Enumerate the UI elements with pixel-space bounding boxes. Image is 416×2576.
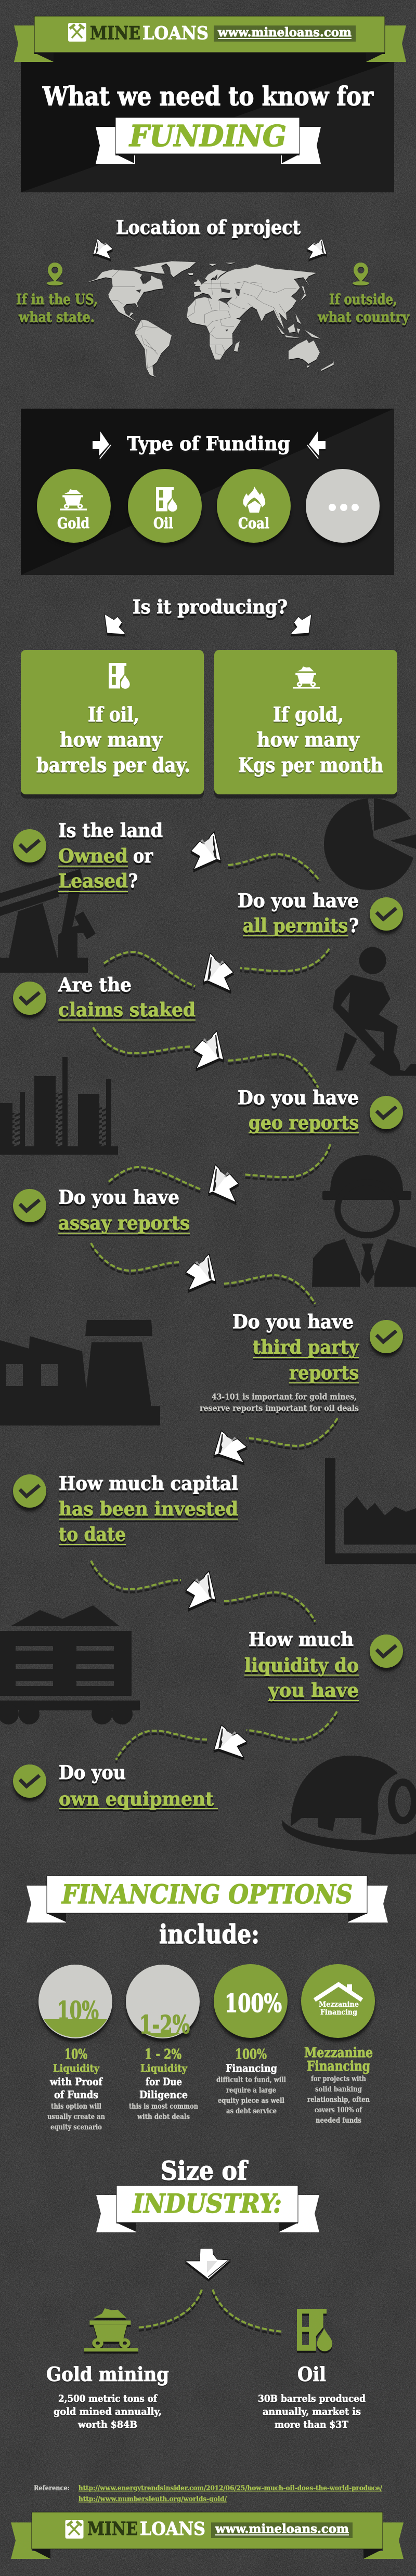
dashed connector 14 <box>116 1731 207 1760</box>
arrow: location right <box>307 239 327 259</box>
arrow: type right <box>307 431 326 459</box>
background icon: pumpjack <box>0 867 96 973</box>
caption <box>47 2047 105 2132</box>
panel: if oil <box>21 650 204 799</box>
gauge circle <box>301 1964 375 2038</box>
background icon: power plant <box>0 1320 160 1426</box>
text: gold mining: worth $84B <box>77 2419 137 2430</box>
background icon: miner helmet <box>282 1756 416 1854</box>
footer url: www.mineloans.com <box>215 2522 349 2536</box>
map borders <box>112 270 296 368</box>
check mark <box>370 897 403 931</box>
panel: title block <box>21 52 394 192</box>
dashed connector 5 <box>228 1054 318 1088</box>
question text <box>58 974 196 1021</box>
caption: solid banking <box>315 2085 362 2094</box>
question text: own equipment <box>59 1788 214 1810</box>
note text <box>200 1392 359 1413</box>
question text: or <box>133 845 153 867</box>
references <box>34 2485 382 2503</box>
caption: relationship, often <box>307 2096 370 2104</box>
caption: 10% <box>64 2047 87 2062</box>
arrow 1 <box>191 832 221 870</box>
question text <box>58 820 163 892</box>
arrow 2 <box>203 953 233 991</box>
caption: this option will <box>51 2102 101 2111</box>
text: gold mining: Gold mining <box>46 2363 169 2386</box>
arrow 3 <box>193 1031 224 1069</box>
dashed connector: gold <box>138 2290 202 2327</box>
question text: Do you have <box>232 1311 354 1333</box>
arrow 8 <box>214 1725 247 1758</box>
dashed connector 12 <box>224 1592 315 1622</box>
dashed connector 11 <box>91 1561 181 1589</box>
heading: location of project: Location of project <box>116 217 301 239</box>
caption: for projects with <box>311 2075 366 2083</box>
circle: gold <box>37 469 111 543</box>
caption: Liquidity <box>140 2062 188 2074</box>
check mark <box>370 1320 403 1353</box>
arrow: location left <box>93 239 113 259</box>
question text: Do you have <box>58 1186 179 1208</box>
dashed connector 9 <box>224 1275 315 1304</box>
question text: Do you have <box>238 890 359 912</box>
icon: map pin right <box>353 263 369 285</box>
references: Reference: <box>34 2485 70 2492</box>
check mark <box>370 1096 403 1129</box>
question text: ? <box>349 915 359 937</box>
question text: you have <box>268 1680 359 1702</box>
heading: size of: Size of <box>161 2155 249 2186</box>
top banner <box>14 16 406 62</box>
arrow 7 <box>186 1571 216 1609</box>
caption: difficult to fund, will <box>216 2076 286 2084</box>
caption: for Due <box>146 2075 182 2088</box>
check mark <box>370 1634 403 1668</box>
panel: if oil: If oil, <box>88 703 139 726</box>
panel: if oil: how many <box>60 728 163 751</box>
question text: Owned <box>58 845 128 867</box>
dashed connector 6 <box>243 1144 330 1177</box>
panel: if gold: If gold, <box>273 703 344 726</box>
question: claims <box>13 974 196 1021</box>
caption: equity piece as well <box>218 2097 284 2105</box>
question: liquidity <box>244 1629 403 1702</box>
circle: more <box>306 469 380 543</box>
check mark <box>13 1764 46 1798</box>
question text: assay reports <box>58 1212 190 1234</box>
question: capital <box>13 1473 238 1546</box>
text: gold mining <box>46 2363 169 2430</box>
ribbon: financing options: FINANCING OPTIONS <box>61 1879 353 1910</box>
dashed connector 10 <box>246 1418 337 1446</box>
check mark <box>13 1474 46 1508</box>
question text: liquidity do <box>244 1655 359 1677</box>
question text: How much <box>249 1629 354 1651</box>
arrow: producing left <box>105 614 125 634</box>
caption: of Funds <box>54 2088 98 2101</box>
note text: reserve reports important for oil deals <box>200 1403 359 1413</box>
icon: map pin left <box>47 263 63 285</box>
question: land <box>13 820 163 892</box>
check mark <box>13 829 46 862</box>
text: oil: Oil <box>297 2363 326 2386</box>
question text: has been invested <box>59 1498 238 1520</box>
ribbon: FUNDING: FUNDING <box>128 119 287 153</box>
gauge circle <box>214 1964 288 2038</box>
world map <box>87 261 334 377</box>
ribbon: financing options <box>27 1876 388 1923</box>
text: gold mining: 2,500 metric tons of <box>58 2393 158 2404</box>
heading: type of funding: Type of Funding <box>127 433 290 455</box>
question: permits <box>238 890 403 937</box>
logo wordmark: MINE <box>90 23 140 44</box>
question text <box>244 1629 359 1702</box>
caption: 100% <box>235 2047 267 2062</box>
arrow: down <box>185 2248 230 2279</box>
title: What we need to know for <box>42 81 374 111</box>
gauge circle: 100% <box>225 1989 282 2018</box>
caption: Mezzanine <box>304 2045 373 2061</box>
caption: Financing <box>307 2059 370 2074</box>
gauge circle <box>38 1965 112 2038</box>
gauge circle: Financing <box>320 2008 357 2017</box>
background icon: factory <box>325 1458 416 1564</box>
heading: include: include: <box>159 1919 259 1950</box>
question text: Is the land <box>58 820 163 842</box>
question text: Do you <box>59 1762 126 1784</box>
footer wordmark: LOANS <box>140 2518 205 2540</box>
question text <box>58 1186 190 1234</box>
caption: as debt service <box>226 2107 277 2115</box>
arrow 5 <box>186 1254 216 1290</box>
text: if in the US <box>16 292 98 325</box>
question text: Are the <box>58 974 132 996</box>
caption <box>129 2047 198 2121</box>
text: oil: more than $3T <box>275 2419 348 2430</box>
option: 10 percent liquidity <box>38 1965 112 2132</box>
dashed connector 1 <box>228 854 320 881</box>
question text: Leased <box>58 870 128 892</box>
question text <box>59 1762 218 1810</box>
website url: www.mineloans.com <box>217 25 352 40</box>
text: if in the US: If in the US, <box>16 292 98 308</box>
text: gold mining: gold mined annually, <box>54 2406 162 2417</box>
seas and lakes on the map <box>136 274 240 332</box>
caption: usually create an <box>47 2113 105 2121</box>
icon: logo <box>68 23 86 42</box>
note text: 43-101 is important for gold mines, <box>212 1392 357 1402</box>
gauge circle: Mezzanine <box>319 2000 359 2009</box>
caption: Financing <box>226 2062 277 2074</box>
background icon: refinery <box>0 1057 118 1155</box>
caption: Diligence <box>139 2088 188 2101</box>
caption <box>216 2047 286 2115</box>
circle: gold: Gold <box>57 515 89 532</box>
circle: oil: Oil <box>153 515 173 532</box>
arrow: producing right <box>291 614 311 634</box>
question text: ? <box>128 870 138 892</box>
caption: needed funds <box>316 2116 361 2125</box>
panel: if oil: barrels per day. <box>36 753 190 777</box>
ribbon: industry: INDUSTRY: <box>132 2188 282 2219</box>
question: assay reports <box>13 1186 190 1234</box>
panel: if gold: how many <box>257 728 360 751</box>
background icon: engineer with hard hat <box>312 1155 416 1287</box>
question: geo reports <box>238 1087 403 1134</box>
check mark <box>13 982 46 1015</box>
background icon: coal rail car <box>0 1605 140 1724</box>
question text <box>232 1311 359 1384</box>
question text: Do you have <box>238 1087 359 1109</box>
question text: claims staked <box>58 999 196 1021</box>
question text: all permits <box>243 915 348 937</box>
dashed connector 13 <box>246 1711 337 1740</box>
panel: if gold: Kgs per month <box>238 753 383 777</box>
caption: Liquidity <box>53 2062 100 2074</box>
caption: equity scenario <box>50 2123 102 2132</box>
icon: footer logo <box>66 2520 83 2539</box>
panel: type of funding <box>21 409 394 575</box>
logo wordmark: LOANS <box>142 23 209 44</box>
question text <box>59 1473 238 1546</box>
caption: with Proof <box>49 2075 103 2088</box>
text: if in the US: what state. <box>18 309 95 325</box>
check mark <box>13 1189 46 1222</box>
option: 1-2 percent liquidity <box>126 1965 200 2121</box>
background icon: pie chart <box>324 799 416 890</box>
background icon: worker with shovel <box>333 947 416 1076</box>
circle: coal: Coal <box>238 515 269 532</box>
references: http://www.numbersleuth.org/worlds-gold/ <box>79 2495 227 2503</box>
text: oil <box>258 2363 366 2430</box>
question text: third party <box>253 1337 359 1358</box>
question text: to date <box>59 1524 126 1546</box>
gauge circle: 10% <box>57 1996 99 2025</box>
footer banner <box>11 2512 404 2559</box>
option: 100 percent financing <box>214 1964 288 2115</box>
text: oil: 30B barrels produced <box>258 2393 366 2404</box>
icon: big oil barrel <box>297 2309 332 2351</box>
circle: oil <box>128 469 202 543</box>
gauge circle: 1-2% <box>139 2010 190 2039</box>
gauge circle <box>126 1965 200 2039</box>
question text: reports <box>289 1362 359 1384</box>
dashed connector 7 <box>109 1167 201 1189</box>
icon: big mine cart <box>84 2308 138 2351</box>
caption <box>304 2045 373 2125</box>
question: equipment <box>13 1762 218 1810</box>
footer wordmark: MINE <box>87 2518 138 2540</box>
panel: if gold <box>214 650 397 799</box>
circle: coal <box>217 469 291 543</box>
caption: covers 100% of <box>315 2106 362 2114</box>
question text: How much capital <box>59 1473 238 1495</box>
arrow 4 <box>209 1165 239 1202</box>
text: oil: annually, market is <box>263 2406 361 2417</box>
dashed connector 8 <box>91 1243 181 1271</box>
text: if outside: If outside, <box>329 292 397 308</box>
caption: with debt deals <box>137 2113 190 2121</box>
text: if outside <box>317 292 410 325</box>
heading: is it producing: Is it producing? <box>133 596 288 618</box>
arrow: type left <box>93 431 111 459</box>
caption: 1 - 2% <box>145 2047 181 2062</box>
caption: this is most common <box>129 2102 198 2111</box>
arrow 6 <box>214 1431 247 1463</box>
question text <box>238 890 359 937</box>
dashed connector 4 <box>93 1027 192 1053</box>
references: http://www.energytrendsinsider.com/2012/06/25/how-much-oil-does-the-world-produce/ <box>79 2485 382 2492</box>
dashed connector 3 <box>104 952 195 986</box>
question text: geo reports <box>249 1112 359 1134</box>
dashed connector: oil <box>213 2290 282 2332</box>
ribbon: FUNDING <box>96 117 321 164</box>
dashed connector 2 <box>240 949 329 971</box>
question: third party reports <box>200 1311 403 1413</box>
ribbon: industry <box>96 2186 319 2232</box>
caption: require a large <box>226 2086 276 2095</box>
option: mezzanine financing <box>301 1964 375 2125</box>
question text <box>238 1087 359 1134</box>
